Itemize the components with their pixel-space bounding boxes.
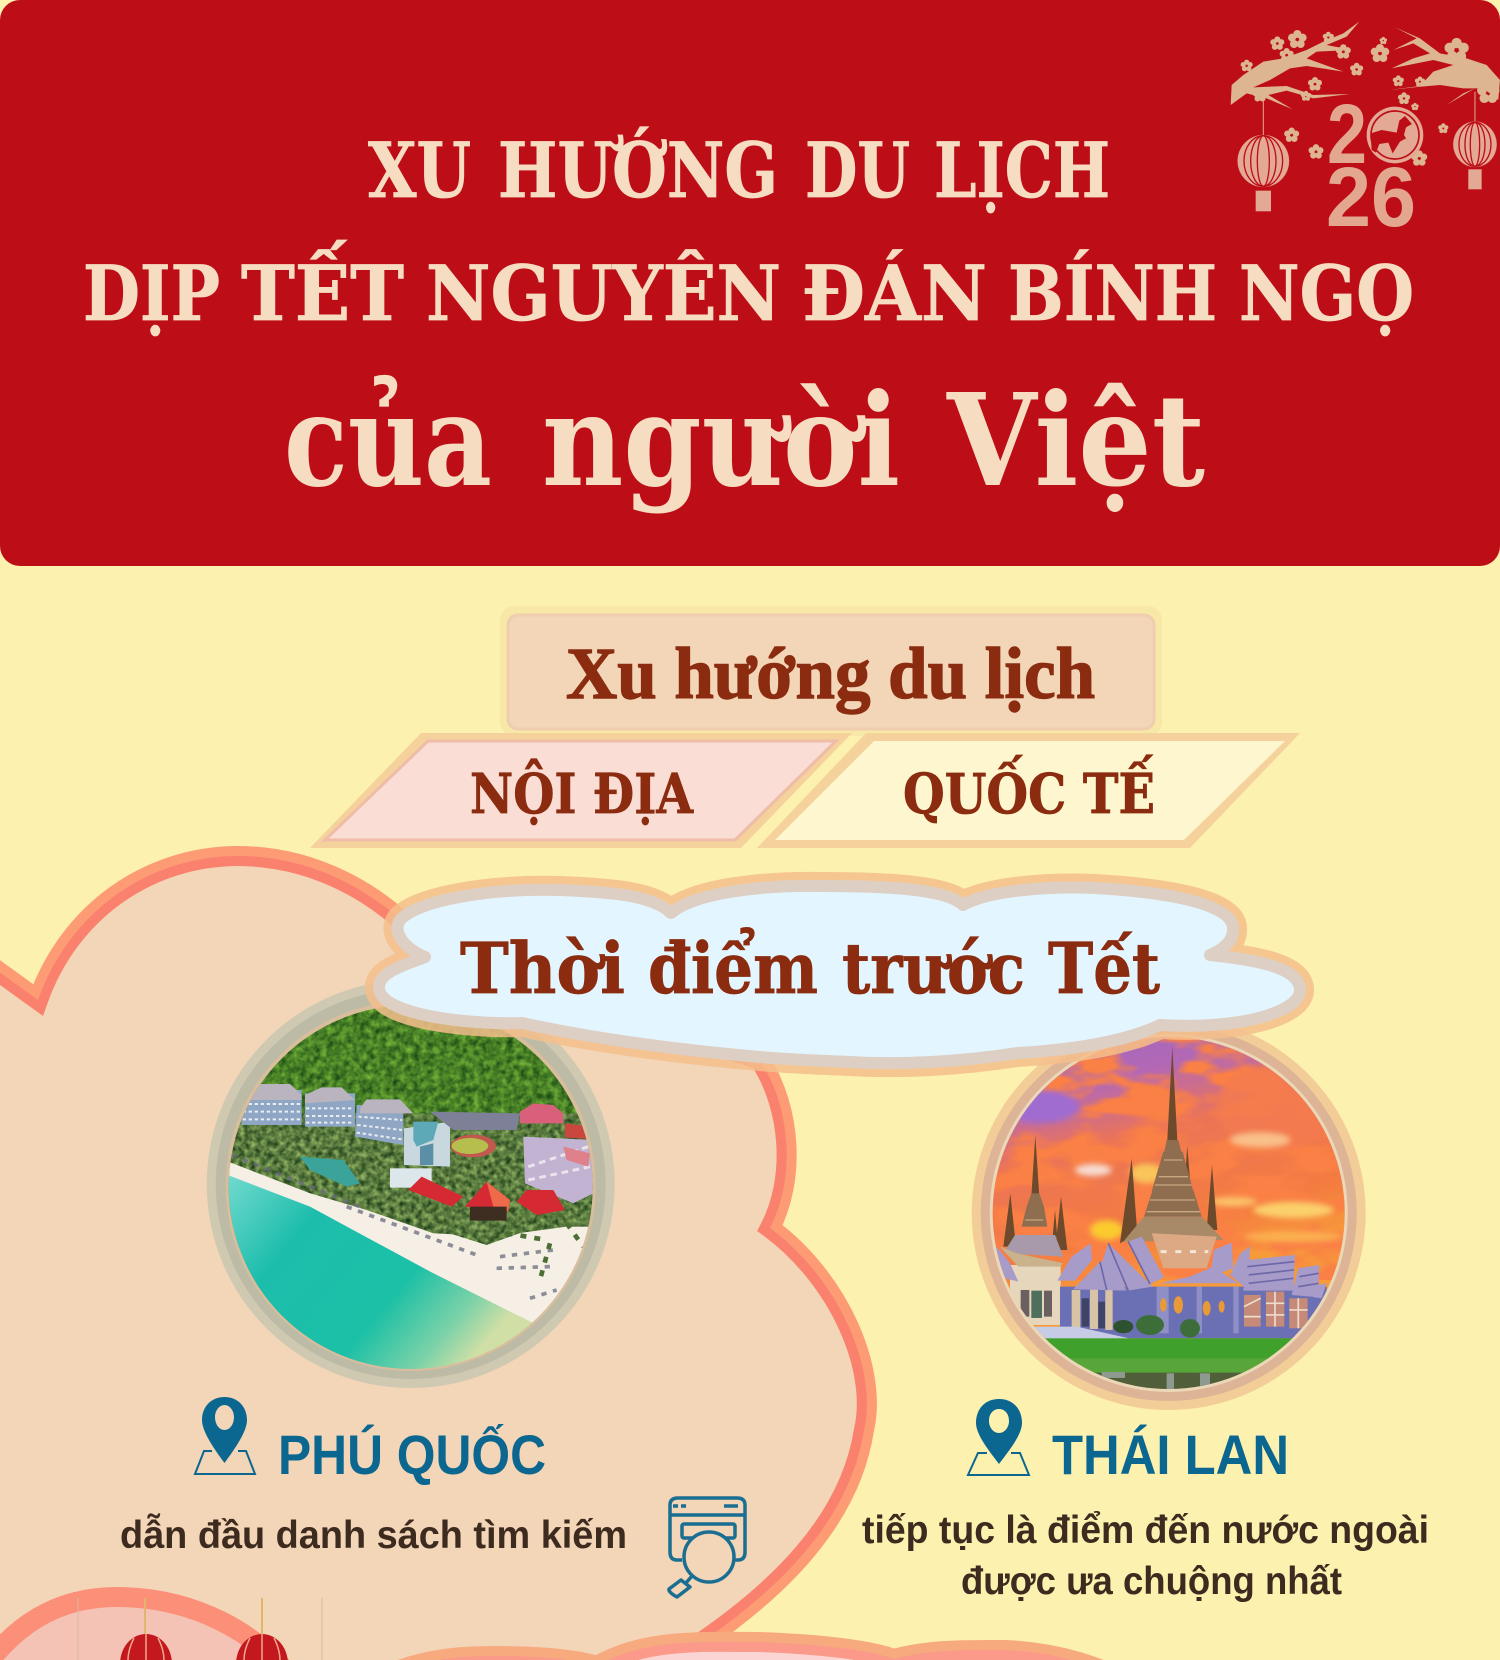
panel: international tab <box>757 733 1300 848</box>
title line 2 <box>83 239 1414 338</box>
panel: bottom pink cloud <box>340 1642 1160 1660</box>
description: được ưa chuộng nhất <box>961 1560 1342 1603</box>
title line 1: HƯỚNG <box>498 126 778 215</box>
block: Phú Quốc <box>120 1397 745 1597</box>
photo: Thai temple <box>972 1016 1366 1410</box>
title line 2: BÍNH <box>1008 248 1217 338</box>
heading: Thời điểm trước Tết: điểm <box>648 927 818 1010</box>
title line 2: NGUYÊN <box>426 248 781 338</box>
title line 1: LỊCH <box>934 126 1110 215</box>
heading: Xu hướng du lịch: Xu hướng du lịch <box>566 633 1095 714</box>
village <box>523 1137 593 1203</box>
panel: header banner <box>0 0 1500 566</box>
icon: blossom branches, lanterns and 2026 emblem <box>1231 22 1500 211</box>
year text 2026: 2 <box>1327 87 1367 181</box>
description: tiếp tục là điểm đến nước ngoài <box>862 1509 1429 1552</box>
title line 1 <box>368 126 1110 215</box>
horse emblem <box>1367 107 1423 163</box>
hotels <box>242 1090 403 1145</box>
beach <box>228 1162 600 1323</box>
label: QUỐC TẾ: QUỐC TẾ <box>903 755 1155 826</box>
description <box>862 1509 1429 1603</box>
label: NỘI ĐỊA: NỘI ĐỊA <box>470 759 694 826</box>
panel: trend heading box <box>500 606 1162 736</box>
description: dẫn đầu danh sách tìm kiếm <box>120 1513 627 1557</box>
main tower tiers <box>1022 1140 1202 1227</box>
left lantern <box>1238 100 1289 211</box>
block: Thái Lan <box>862 1399 1429 1603</box>
icon: map pin <box>195 1397 255 1474</box>
icon: browser search <box>669 1498 745 1597</box>
title line 3: người <box>542 366 900 515</box>
red roofs <box>408 1177 565 1215</box>
lantern right <box>236 1598 288 1660</box>
title line 2: ĐÁN <box>802 248 987 338</box>
year text 2026 <box>1326 87 1416 244</box>
roofs <box>993 1237 1327 1298</box>
title line 2: TẾT <box>241 239 404 338</box>
lawn and pond <box>1045 1338 1292 1359</box>
heading: Thời điểm trước Tết: Thời <box>460 927 625 1010</box>
sea <box>228 1176 532 1369</box>
lantern left <box>120 1598 172 1660</box>
title line 1: XU <box>368 126 471 215</box>
place name: THÁI LAN <box>1052 1423 1289 1486</box>
title line 1: DU <box>805 126 910 215</box>
right lantern <box>1453 92 1497 189</box>
heading: Thời điểm trước Tết: Tết <box>1048 927 1160 1010</box>
panel: domestic tab <box>310 733 852 848</box>
heading: Thời điểm trước Tết: trước <box>842 927 1025 1010</box>
title line 2: DỊP <box>83 249 220 338</box>
title line 3 <box>284 366 1205 515</box>
spires <box>1003 1047 1217 1250</box>
photo: Phú Quốc resort <box>207 980 617 1388</box>
walls <box>1060 1287 1327 1338</box>
title line 2: NGỌ <box>1239 249 1414 338</box>
panel: left peach cloud <box>0 856 867 1660</box>
title line 3: Việt <box>946 366 1205 515</box>
heading: Thời điểm trước Tết <box>460 927 1160 1010</box>
panel: bottom-left pink lobe with lanterns <box>0 1597 322 1660</box>
place name: PHÚ QUỐC <box>278 1423 546 1486</box>
left building <box>1010 1265 1061 1325</box>
left branch <box>1231 22 1363 109</box>
year text 2026: 26 <box>1326 150 1416 244</box>
title line 3: của <box>284 366 492 515</box>
cloud banner: Thời điểm trước Tết <box>379 886 1300 1063</box>
icon: map pin <box>968 1399 1029 1475</box>
green field <box>451 1135 496 1157</box>
right branch <box>1284 27 1500 166</box>
